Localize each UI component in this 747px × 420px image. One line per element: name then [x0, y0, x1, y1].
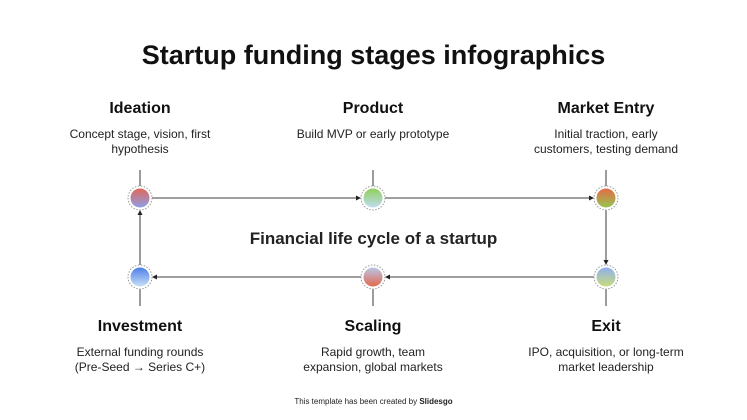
- stage: Exit: market leadership: [558, 360, 654, 374]
- center label: Financial life cycle of a startup: [250, 229, 497, 248]
- stage: Exit: IPO, acquisition, or long-term: [528, 345, 684, 359]
- stage: Product: Product: [343, 100, 403, 117]
- stage: Investment: (Pre-Seed → Series C+): [75, 360, 205, 374]
- stage: Investment: Investment: [98, 318, 182, 335]
- stage: Product: [297, 100, 449, 141]
- stage: Ideation: hypothesis: [111, 142, 169, 156]
- title: Startup funding stages infographics: [142, 40, 605, 70]
- footer credit: This template has been created by Slidesgo: [294, 397, 453, 406]
- stage: Ideation: [70, 100, 210, 156]
- stage: Scaling: Rapid growth, team: [321, 345, 425, 359]
- stage: Scaling: Scaling: [345, 318, 401, 335]
- stage: Exit: Exit: [591, 318, 621, 335]
- stage: Market Entry: Initial traction, early: [554, 127, 658, 141]
- stage: Investment: External funding rounds: [77, 345, 203, 359]
- stage: Scaling: [303, 318, 443, 374]
- stage: Market Entry: [534, 100, 678, 156]
- stage: Market Entry: customers, testing demand: [534, 142, 678, 156]
- stage: Ideation: Ideation: [109, 100, 171, 117]
- stage: Ideation: Concept stage, vision, first: [70, 127, 210, 141]
- stage: Exit: [528, 318, 684, 374]
- stage: Investment: [75, 318, 205, 374]
- stage: Market Entry: Market Entry: [558, 100, 654, 117]
- stage: Scaling: expansion, global markets: [303, 360, 443, 374]
- stage: Product: Build MVP or early prototype: [297, 127, 449, 141]
